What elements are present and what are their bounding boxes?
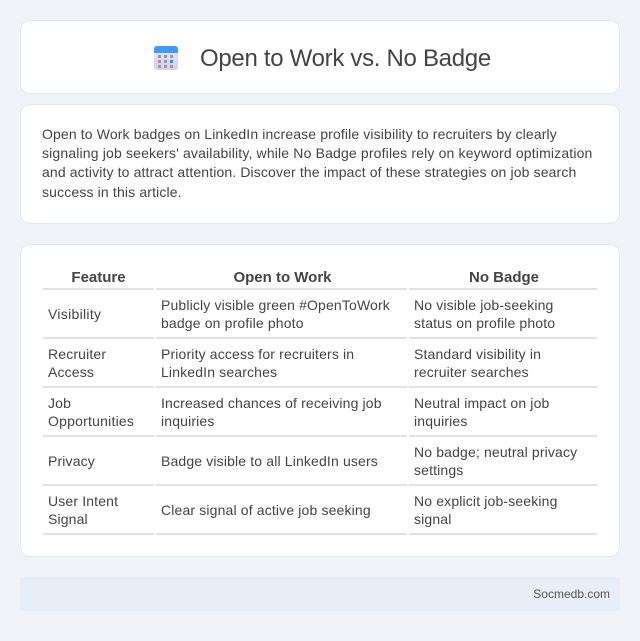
row: privacy: Badge visible to all LinkedIn users bbox=[161, 453, 378, 469]
row: user intent signal: User Intent bbox=[48, 493, 118, 509]
table header: No Badge bbox=[469, 269, 539, 286]
row: recruiter access: Standard visibility in bbox=[414, 346, 541, 362]
row: user intent signal bbox=[48, 493, 558, 527]
footer bar bbox=[20, 577, 620, 611]
row: recruiter access: LinkedIn searches bbox=[161, 364, 277, 380]
row: user intent signal: signal bbox=[414, 511, 451, 527]
intro text: signaling job seekers' availability, while No Badge profiles rely on keyword optimization bbox=[42, 145, 592, 161]
intro text: Open to Work badges on LinkedIn increase profile visibility to recruiters by clearly bbox=[42, 126, 557, 142]
row: recruiter access: Recruiter bbox=[48, 346, 106, 362]
row: job opportunities: Job bbox=[48, 395, 71, 411]
row: job opportunities: inquiries bbox=[414, 413, 468, 429]
row: visibility: Publicly visible green #OpenToWork bbox=[161, 297, 390, 313]
row: privacy: No badge; neutral privacy bbox=[414, 444, 577, 460]
table header bbox=[71, 269, 539, 286]
row: privacy: settings bbox=[414, 462, 463, 478]
intro text: and activity to attract attention. Discover the impact of these strategies on job search bbox=[42, 164, 576, 180]
title: Open to Work vs. No Badge bbox=[200, 45, 491, 72]
intro text bbox=[42, 126, 592, 200]
table card bbox=[20, 244, 620, 557]
row: recruiter access: Priority access for recruiters in bbox=[161, 346, 354, 362]
row: user intent signal: Clear signal of active job seeking bbox=[161, 502, 371, 518]
row: visibility: status on profile photo bbox=[414, 315, 555, 331]
row: visibility: Visibility bbox=[48, 306, 101, 322]
table header: Feature bbox=[71, 269, 126, 286]
row: job opportunities bbox=[48, 395, 549, 429]
row: job opportunities: Opportunities bbox=[48, 413, 134, 429]
footer credit: Socmedb.com bbox=[533, 587, 610, 601]
row: recruiter access bbox=[48, 346, 541, 380]
icon: calendar bbox=[154, 46, 178, 70]
row: recruiter access: Access bbox=[48, 364, 94, 380]
row: visibility: No visible job-seeking bbox=[414, 297, 553, 313]
intro text: success in this article. bbox=[42, 184, 182, 200]
row: job opportunities: inquiries bbox=[161, 413, 214, 429]
intro card bbox=[20, 104, 620, 224]
row: job opportunities: Increased chances of receiving job bbox=[161, 395, 382, 411]
row: user intent signal: No explicit job-seeking bbox=[414, 493, 558, 509]
row: visibility: badge on profile photo bbox=[161, 315, 304, 331]
header card bbox=[20, 20, 620, 94]
comparison table bbox=[43, 269, 597, 535]
row: privacy bbox=[48, 444, 578, 478]
row: privacy: Privacy bbox=[48, 453, 95, 469]
row: visibility bbox=[48, 297, 555, 331]
row: user intent signal: Signal bbox=[48, 511, 88, 527]
row: job opportunities: Neutral impact on job bbox=[414, 395, 549, 411]
table header: Open to Work bbox=[233, 269, 332, 286]
row: recruiter access: recruiter searches bbox=[414, 364, 529, 380]
